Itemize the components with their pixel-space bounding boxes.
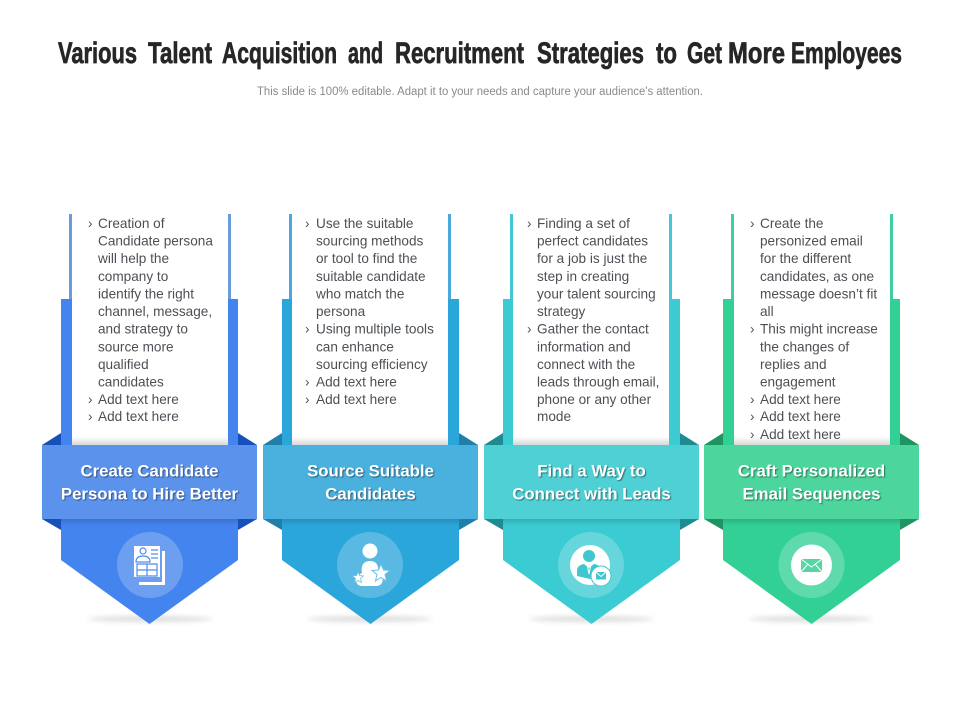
bullet list: perfect candidates [537, 234, 648, 248]
bullet list: This might increase [760, 322, 878, 336]
icon: person with stars [337, 532, 403, 598]
ground shadow [749, 616, 873, 622]
bullet list: sourcing efficiency [316, 357, 428, 372]
bullet list: strategy [537, 304, 586, 319]
title: Strategies [537, 37, 644, 70]
bullet list: › [750, 409, 755, 424]
title: Get [687, 37, 722, 70]
bullet list: Creation of [98, 216, 165, 231]
bullet list: replies and [760, 357, 827, 372]
bullet list [750, 216, 878, 442]
banner heading: Source Suitable [307, 462, 434, 480]
banner heading: Persona to Hire Better [61, 484, 239, 504]
bullet list: information and [537, 340, 631, 354]
title: Talent [148, 37, 212, 70]
folds [263, 433, 478, 530]
bullet list: Add text here [760, 409, 841, 424]
bullet list: will help the [97, 251, 169, 266]
title: Recruitment [395, 37, 524, 70]
folds [484, 433, 699, 530]
thin side strips [289, 214, 451, 299]
bullet list: step in creating [537, 269, 629, 284]
bullet list: › [527, 216, 532, 231]
bullet list: source more [98, 340, 174, 354]
bullet list: › [527, 322, 532, 336]
icon: envelope [778, 532, 844, 598]
text panel background [513, 214, 669, 445]
bullet list: engagement [760, 374, 836, 390]
bullet list: for a job is just the [537, 251, 647, 266]
bullet list: candidates [98, 374, 164, 390]
panel: source suitable candidates [263, 214, 478, 624]
bullet list: › [88, 409, 93, 424]
bullet list: leads through email, [537, 374, 659, 390]
bullet list [88, 216, 213, 424]
banner heading [738, 462, 885, 504]
bullet list: company to [98, 269, 168, 284]
title: to [656, 37, 677, 70]
banner heading [61, 462, 239, 504]
bullet list: Add text here [316, 392, 397, 407]
banner [704, 445, 919, 519]
folds [704, 433, 919, 530]
bullet list: Add text here [760, 392, 841, 407]
bullet list: › [305, 322, 310, 336]
text panel background [292, 214, 448, 445]
banner heading: Email Sequences [742, 484, 881, 504]
thin side strips [731, 214, 893, 299]
title: More [728, 37, 785, 70]
bullet list: phone or any other [537, 392, 652, 407]
bullet list: connect with the [537, 357, 635, 372]
ground shadow [308, 616, 432, 622]
bullet list: all [760, 304, 774, 319]
banner heading [307, 462, 434, 504]
bullet list: Add text here [760, 427, 841, 442]
bullet list: › [750, 427, 755, 442]
bullet list: your talent sourcing [537, 286, 656, 302]
folds [42, 433, 257, 530]
bullet list: persona [316, 304, 366, 319]
bullet list: Gather the contact [537, 322, 649, 336]
banner heading: Find a Way to [537, 462, 646, 480]
bullet list: Using multiple tools [316, 322, 434, 336]
ground shadow [88, 616, 212, 622]
arrow body [723, 299, 900, 624]
bullet list: Candidate persona [98, 234, 213, 248]
thin side strips [510, 214, 672, 299]
banner [484, 445, 699, 519]
text panel background [734, 214, 890, 445]
bullet list: channel, message, [98, 304, 212, 319]
panel: create candidate persona [42, 214, 257, 624]
bullet list: › [88, 216, 93, 231]
bullet list: and strategy to [98, 322, 188, 336]
bullet list: qualified [98, 357, 149, 372]
bullet list: Use the suitable [316, 216, 413, 231]
title: Various [58, 37, 137, 70]
thin side strips [69, 214, 231, 299]
bullet list [527, 216, 659, 424]
banner heading: Candidates [325, 484, 416, 504]
bullet list: Add text here [98, 409, 179, 424]
bullet list: for the different [760, 251, 851, 266]
ground shadow [529, 616, 653, 622]
banner [42, 445, 257, 519]
title: Employees [791, 37, 902, 70]
bullet list: Add text here [98, 392, 179, 407]
bullet list [305, 216, 434, 407]
panel: craft personalized email [704, 214, 919, 624]
arrow body [61, 299, 238, 624]
bullet list: › [750, 392, 755, 407]
bullet list: Add text here [316, 374, 397, 390]
bullet list: › [88, 392, 93, 407]
arrow body [503, 299, 680, 624]
bullet list: personized email [760, 234, 863, 248]
bullet list: › [750, 216, 755, 231]
bullet list: Create the [760, 216, 823, 231]
bullet list: suitable candidate [316, 269, 426, 284]
title: and [348, 37, 383, 70]
bullet list: Finding a set of [537, 216, 630, 231]
subtitle: This slide is 100% editable. Adapt it to your needs and capture your audience's attention. [257, 86, 703, 98]
bullet list: who match the [315, 286, 404, 302]
bullet list: can enhance [316, 340, 394, 354]
icon: candidate profile document [117, 532, 183, 598]
bullet list: identify the right [98, 286, 194, 302]
bullet list: › [305, 374, 310, 390]
bullet list: › [750, 322, 755, 336]
bullet list: › [305, 392, 310, 407]
panel: find a way to connect [484, 214, 699, 624]
bullet list: or tool to find the [316, 251, 417, 266]
bullet list: sourcing methods [316, 234, 423, 248]
banner heading [512, 462, 671, 504]
bullet list: message doesn’t fit [760, 286, 877, 302]
icon: business person with envelope [558, 532, 624, 598]
arrow body [282, 299, 459, 624]
title: Acquisition [222, 37, 337, 70]
bullet list: candidates, as one [760, 269, 874, 284]
bullet list: › [305, 216, 310, 231]
bullet list: the changes of [760, 340, 849, 354]
banner heading: Craft Personalized [738, 462, 885, 480]
banner [263, 445, 478, 519]
banner heading: Create Candidate [80, 462, 219, 480]
bullet list: mode [537, 409, 571, 424]
banner heading: Connect with Leads [512, 484, 671, 504]
title [58, 37, 902, 70]
text panel background [72, 214, 228, 445]
